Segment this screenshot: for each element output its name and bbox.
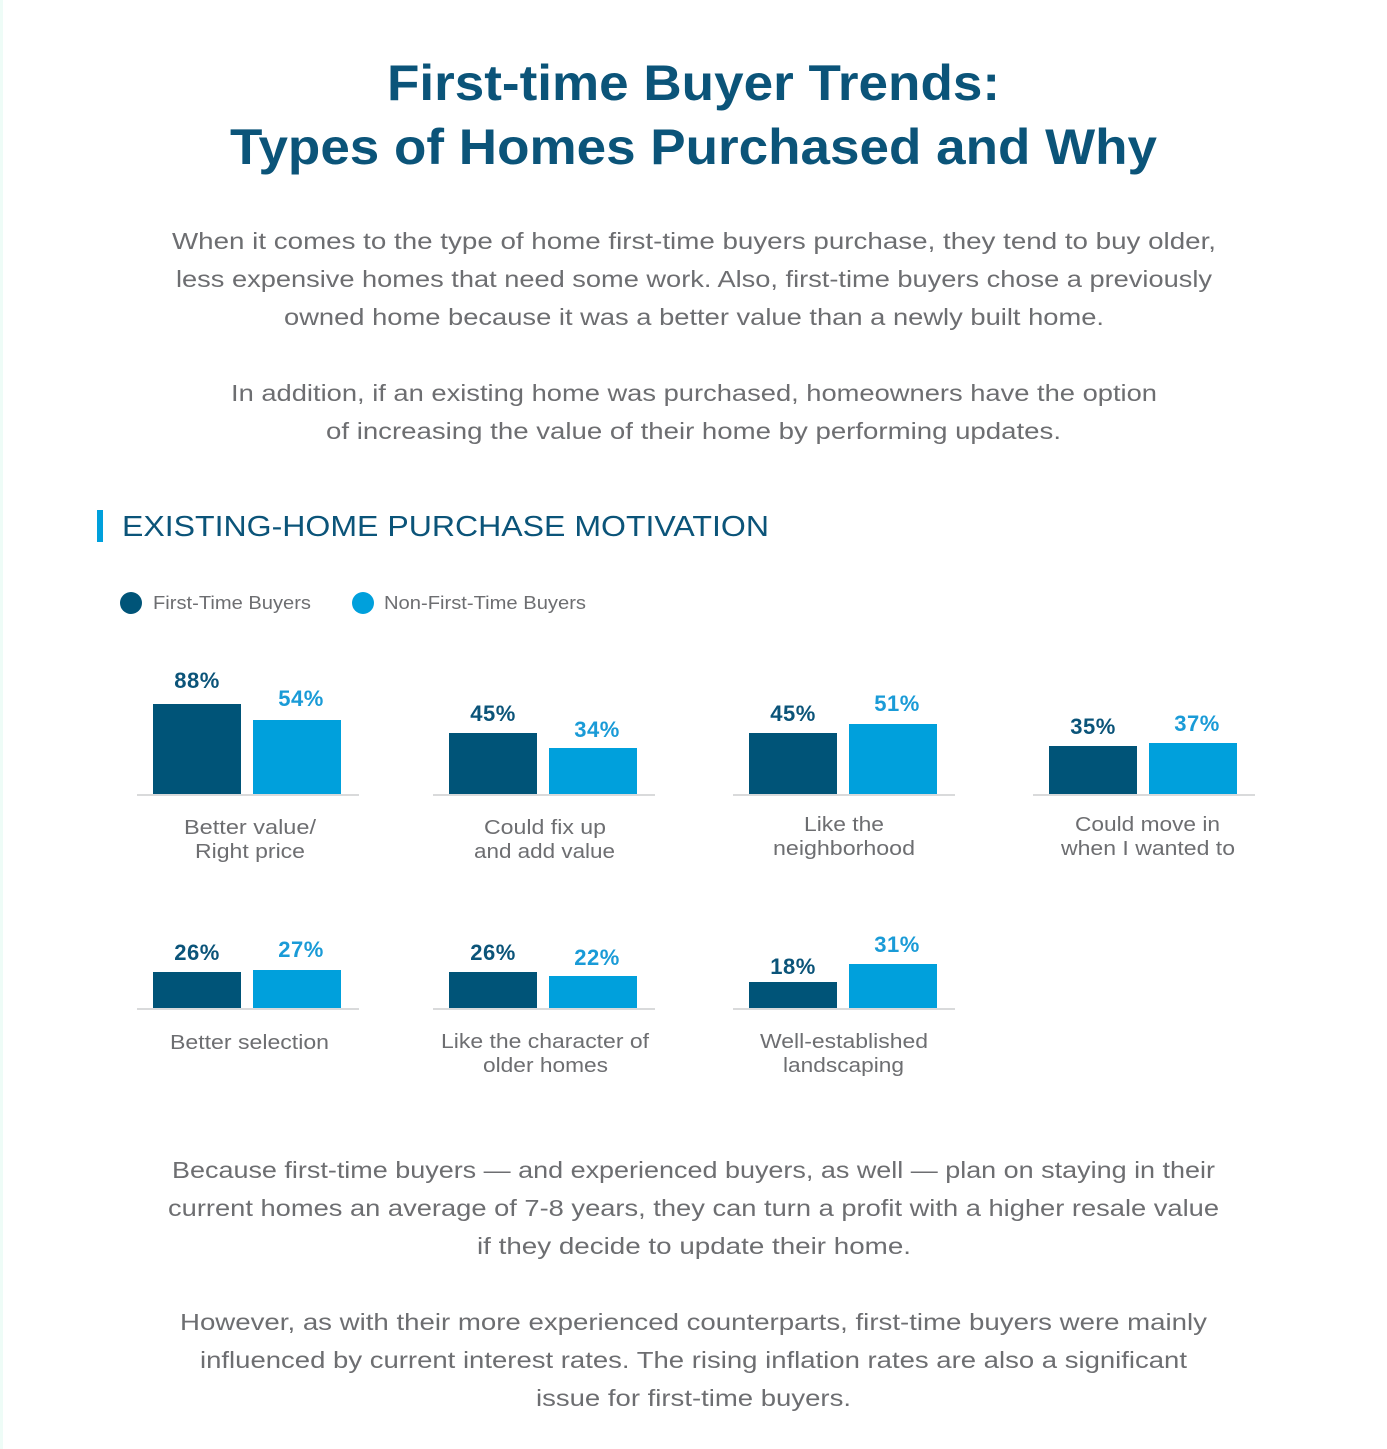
- closing text: [168, 1157, 1219, 1411]
- chart: better value: Better value/: [184, 817, 317, 839]
- intro text: In addition, if an existing home was purchased, homeowners have the option: [231, 380, 1157, 406]
- chart: character: [433, 940, 655, 1077]
- chart: selection: Better selection: [170, 1032, 329, 1054]
- chart: fix up: and add value: [474, 841, 615, 863]
- intro text: When it comes to the type of home first-time buyers purchase, they tend to buy older,: [172, 228, 1216, 254]
- closing text: influenced by current interest rates. The rising inflation rates are also a significant: [200, 1347, 1188, 1373]
- chart: character: Like the character of: [441, 1031, 649, 1053]
- intro text: of increasing the value of their home by performing updates.: [326, 418, 1061, 444]
- title: First-time Buyer Trends:: [387, 55, 1000, 111]
- chart: selection: 27%: [278, 937, 324, 962]
- intro text: less expensive homes that need some work. Also, first-time buyers chose a previously: [176, 266, 1213, 292]
- chart: landscaping: landscaping: [783, 1055, 904, 1077]
- intro text: [172, 228, 1216, 444]
- chart: better value: 88%: [174, 668, 220, 693]
- chart: landscaping: [733, 932, 955, 1077]
- chart: neighborhood: Like the: [804, 814, 884, 836]
- chart: character: 26%: [470, 940, 516, 965]
- chart: better value: [137, 668, 359, 863]
- chart: move in: Could move in: [1075, 814, 1220, 836]
- chart: move in: when I wanted to: [1060, 838, 1235, 860]
- chart: character: 22%: [574, 945, 620, 970]
- chart: fix up: 34%: [574, 717, 620, 742]
- closing text: issue for first-time buyers.: [536, 1385, 851, 1411]
- chart: neighborhood: [733, 691, 955, 860]
- intro text: owned home because it was a better value than a newly built home.: [284, 304, 1104, 330]
- legend: Non-First-Time Buyers: [384, 593, 586, 613]
- closing text: Because first-time buyers — and experienced buyers, as well — plan on staying in their: [172, 1157, 1215, 1183]
- chart: better value: Right price: [195, 841, 305, 863]
- legend: First-Time Buyers: [153, 593, 311, 613]
- chart: fix up: Could fix up: [484, 817, 606, 839]
- chart: neighborhood: 51%: [874, 691, 920, 716]
- closing text: if they decide to update their home.: [477, 1233, 911, 1259]
- chart: move in: 37%: [1174, 711, 1220, 736]
- title: Types of Homes Purchased and Why: [230, 119, 1157, 175]
- section heading: EXISTING-HOME PURCHASE MOTIVATION: [122, 511, 769, 543]
- closing text: current homes an average of 7-8 years, they can turn a profit with a higher resale value: [168, 1195, 1219, 1221]
- chart: selection: [137, 937, 359, 1054]
- chart: neighborhood: neighborhood: [773, 838, 915, 860]
- chart: fix up: [433, 701, 655, 863]
- chart: character: older homes: [483, 1055, 608, 1077]
- chart: landscaping: 18%: [770, 954, 816, 979]
- chart: neighborhood: 45%: [770, 701, 816, 726]
- closing text: However, as with their more experienced counterparts, first-time buyers were mainly: [180, 1309, 1208, 1335]
- chart: better value: 54%: [278, 686, 324, 711]
- chart: selection: 26%: [174, 940, 220, 965]
- chart: landscaping: 31%: [874, 932, 920, 957]
- chart: landscaping: Well-established: [760, 1031, 928, 1053]
- chart: move in: [1033, 711, 1255, 860]
- legend: [120, 592, 586, 614]
- title: [230, 55, 1157, 175]
- chart: move in: 35%: [1070, 714, 1116, 739]
- chart: fix up: 45%: [470, 701, 516, 726]
